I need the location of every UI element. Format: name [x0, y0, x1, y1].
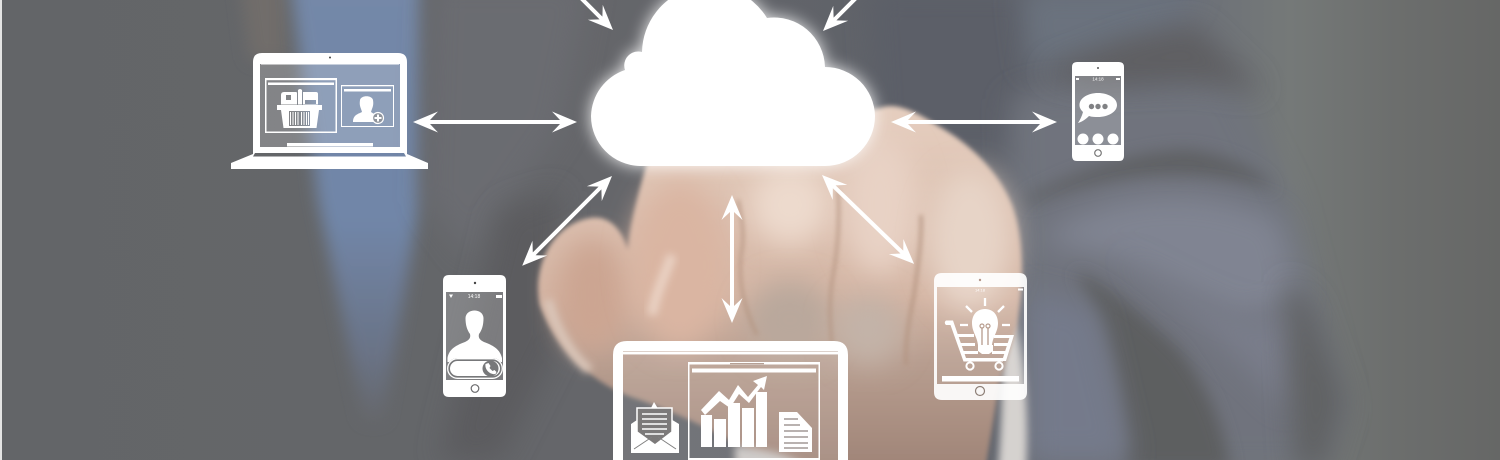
cart: [945, 320, 1014, 370]
arrow: top right: [816, 0, 880, 38]
chat bubble: [1078, 93, 1117, 123]
icon: tablet with bulb and cart: [934, 273, 1027, 400]
finger gaps: [738, 190, 921, 365]
icon: laptop with basket and profile: [231, 53, 428, 169]
arrow: cloud to bottom monitor: [722, 195, 742, 323]
light bulb: [960, 298, 1010, 354]
sleeve under the hand: [735, 445, 810, 460]
dashboard window: [688, 362, 820, 460]
arrow: cloud to left phone: [515, 169, 619, 273]
arrow: cloud to tablet: [815, 167, 921, 271]
envelope: [631, 402, 679, 453]
arrow: cloud to right phone: [891, 112, 1057, 132]
arrow: cloud to laptop: [413, 112, 577, 132]
icon: right phone with chat bubble: [1072, 62, 1124, 161]
caller silhouette: [448, 310, 502, 362]
window: profile: [341, 85, 394, 127]
index finger: [632, 180, 728, 350]
middle finger: [750, 165, 830, 245]
window: basket: [265, 78, 337, 133]
hand: [538, 106, 1022, 460]
clock: 14:18: [468, 294, 480, 300]
thumb shading: [556, 237, 628, 353]
ring finger: [842, 135, 918, 275]
clock: 14:18: [1092, 76, 1104, 82]
icon: left phone with caller: [443, 275, 506, 397]
cuff: [998, 300, 1027, 460]
document: [779, 412, 812, 452]
cloud: [591, 0, 875, 166]
icon: bottom monitor with charts: [613, 341, 848, 460]
chart bars and trend arrow: [701, 376, 767, 447]
arrow: top left: [556, 0, 620, 37]
little finger: [928, 170, 1012, 310]
call slider: [447, 358, 503, 379]
clock: 14:18: [975, 288, 986, 292]
suit sleeve: [1010, 80, 1345, 460]
